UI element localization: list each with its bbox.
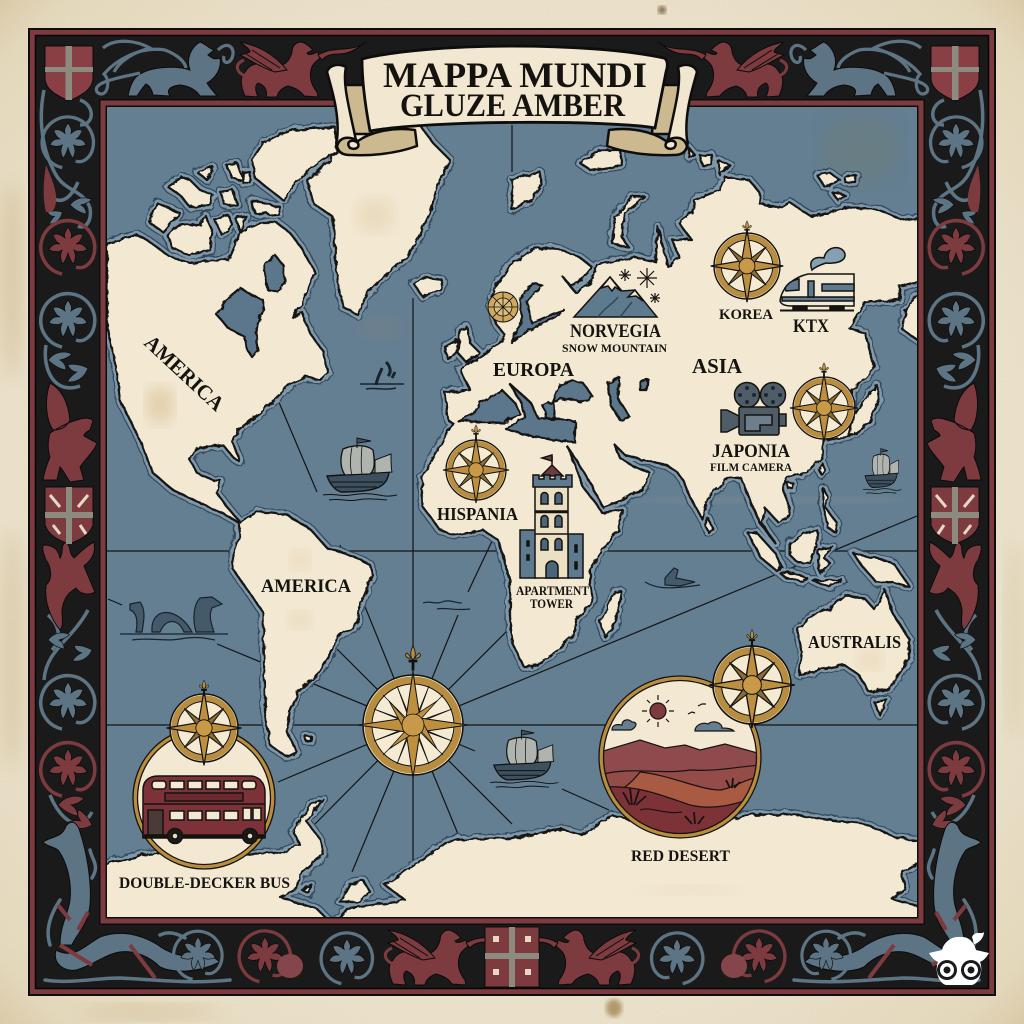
icon: whale in the Atlantic (360, 362, 404, 389)
region labels: EUROPA (493, 359, 575, 381)
parchment stains (146, 197, 883, 895)
region labels: JAPONIA (712, 441, 790, 462)
region labels: AMERICA (140, 330, 230, 416)
title text: MAPPA MUNDI (383, 55, 647, 95)
title banner: GLUZE AMBER (400, 88, 626, 124)
icon: JAPONIA compass (790, 363, 858, 442)
region labels: DOUBLE-DECKER BUS (119, 875, 290, 892)
logo: owl (929, 932, 989, 985)
icon: apartment tower (520, 455, 583, 578)
title banner (327, 46, 697, 155)
icon: snow mountain (574, 268, 660, 317)
icon: bus compass (167, 680, 241, 765)
icon: HISPANIA compass (443, 425, 509, 503)
icon: ship pacific (863, 449, 901, 494)
right ribbon (607, 65, 697, 155)
left ribbon (327, 65, 417, 155)
region labels: KOREA (719, 307, 773, 323)
region labels: AUSTRALIS (808, 632, 901, 652)
icon: film camera (721, 382, 786, 435)
map panel (99, 107, 925, 925)
land halo (99, 125, 925, 925)
icon: small compass scandinavia (488, 292, 518, 322)
main compass rose (358, 646, 468, 778)
region labels: HISPANIA (437, 504, 518, 524)
banner body (362, 46, 667, 131)
icon: double-decker bus (143, 776, 265, 844)
icon: desert compass (709, 630, 795, 728)
region labels: SNOW MOUNTAIN (562, 341, 667, 355)
border ornaments: left half (41, 41, 513, 985)
region labels (119, 307, 901, 892)
icon: KOREA compass (711, 221, 783, 302)
icon: ship atlantic (323, 438, 397, 501)
panel: double-decker bus (133, 680, 275, 869)
fleur-de-lis (406, 646, 420, 670)
region labels: AMERICA (261, 576, 351, 597)
landmasses (99, 125, 925, 925)
icon: fish in the Indian Ocean (645, 568, 700, 588)
icon: sea serpent (120, 597, 228, 640)
icon: snowflakes (619, 268, 660, 303)
panel: red desert (599, 630, 795, 840)
region labels: RED DESERT (631, 848, 730, 865)
region labels: NORVEGIA (570, 321, 661, 342)
icon: KTX train (780, 248, 854, 310)
ocean (107, 107, 917, 917)
inland seas (217, 255, 647, 442)
region labels: APARTMENT (516, 584, 590, 598)
region labels: FILM CAMERA (710, 460, 792, 474)
region labels: TOWER (530, 597, 574, 611)
rhumb lines (107, 125, 917, 917)
icon: waves (423, 601, 470, 610)
bottom shield (485, 927, 539, 987)
region labels: KTX (793, 316, 829, 337)
region labels: ASIA (692, 354, 743, 378)
icon: ship south (490, 730, 558, 788)
border ornaments: right half (511, 41, 983, 985)
